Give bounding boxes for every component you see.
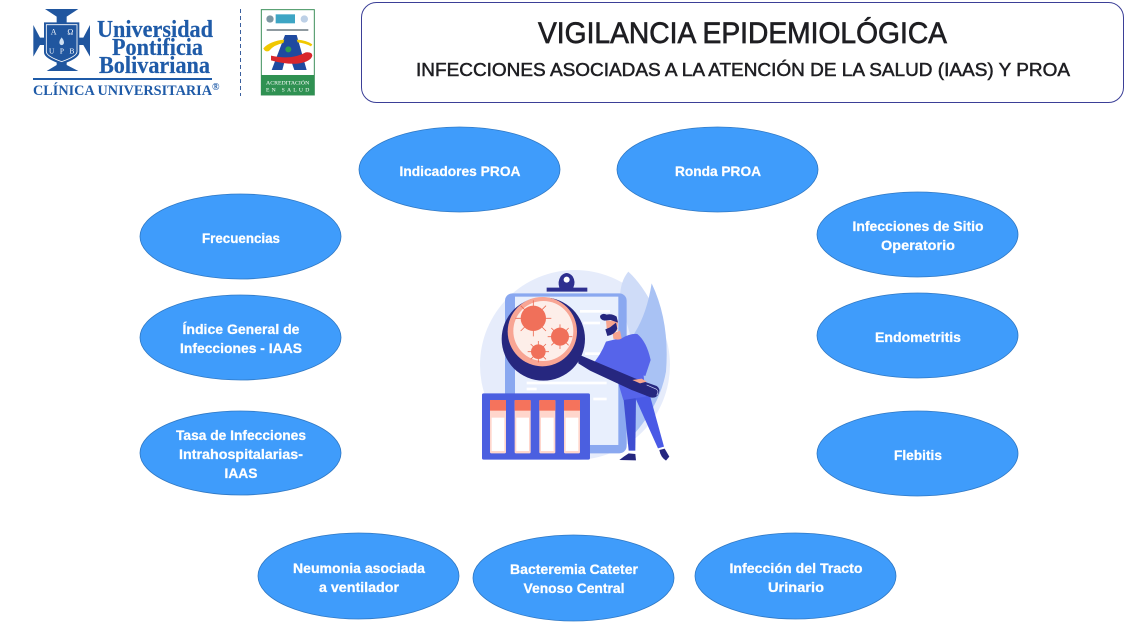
node: Índice General de Infecciones xyxy=(140,295,341,380)
node: Neumonia asociada a ventilador: Neumonia asociada xyxy=(293,560,425,576)
viruses xyxy=(515,300,572,362)
node: Flebitis xyxy=(817,411,1018,496)
logo: Universidad Pontificia Bolivariana xyxy=(33,9,220,99)
logo: Acreditación en Salud: ACREDITACIÓN xyxy=(266,78,309,86)
heading: title: VIGILANCIA EPIDEMIOLÓGICA xyxy=(538,17,947,50)
logo wordmark: Universidad xyxy=(97,17,214,43)
logo wordmark xyxy=(33,17,220,99)
node: Neumonia asociada a ventilador: a ventilador xyxy=(319,579,400,595)
node: Flebitis: Flebitis xyxy=(894,447,942,463)
panel: title box xyxy=(362,2,1124,102)
logo: Acreditación en Salud: EN SALUD xyxy=(266,88,309,94)
node: Tasa de Infecciones: Intrahospitalarias- xyxy=(179,446,303,462)
heading: subtitle: INFECCIONES ASOCIADAS A LA ATENCIÓN DE LA SALUD (IAAS) Y PROA xyxy=(416,59,1071,80)
illustration: doctor inspecting virus with magnifier xyxy=(480,270,670,461)
icon: university crest: UPB xyxy=(49,47,74,56)
node: Infección del Tracto Urinario: Urinario xyxy=(768,579,824,595)
node: Endometritis xyxy=(817,293,1018,378)
node: Frecuencias xyxy=(140,194,341,279)
icon: university crest xyxy=(33,9,90,71)
node: Infección del Tracto Urinario xyxy=(695,533,896,619)
clipboard xyxy=(505,273,627,453)
node: Indicadores PROA xyxy=(359,127,560,212)
logo: Acreditación en Salud xyxy=(261,10,314,95)
node: Ronda PROA xyxy=(617,127,818,212)
node: Índice General de Infecciones: Índice General de xyxy=(182,321,300,337)
node: Índice General de Infecciones: Infecciones - IAAS xyxy=(180,340,302,356)
logo wordmark: ® xyxy=(212,82,220,93)
magnifying glass xyxy=(502,297,585,381)
node: Ronda PROA: Ronda PROA xyxy=(675,163,761,179)
test tube rack xyxy=(482,393,590,460)
node: Tasa de Infecciones xyxy=(140,411,341,495)
node: Bacteremia Cateter Venoso Central: Venoso Central xyxy=(524,580,624,596)
node: Indicadores PROA: Indicadores PROA xyxy=(400,163,520,179)
node: Bacteremia Cateter Venoso Central: Bacteremia Cateter xyxy=(510,561,639,577)
node: Infecciones de Sitio Operatorio: Infecciones de Sitio xyxy=(852,218,984,234)
icon: university crest: A xyxy=(51,27,57,36)
node: Endometritis: Endometritis xyxy=(875,329,961,345)
node: Bacteremia Cateter Venoso Central xyxy=(473,535,674,621)
logo wordmark: Pontificia xyxy=(112,35,203,61)
node: Neumonia asociada a ventilador xyxy=(258,533,459,619)
node: Infecciones de Sitio Operatorio: Operatorio xyxy=(881,237,955,253)
logo wordmark: CLÍNICA UNIVERSITARIA xyxy=(33,82,213,99)
node: Tasa de Infecciones: IAAS xyxy=(224,465,258,481)
node: Tasa de Infecciones: Tasa de Infecciones xyxy=(176,427,306,443)
icon: university crest: Ω xyxy=(67,27,73,36)
man holding magnifier handle xyxy=(578,314,669,461)
logo wordmark: Bolivariana xyxy=(99,53,210,79)
node: Infección del Tracto Urinario: Infección del Tracto xyxy=(730,560,862,576)
node: Infecciones de Sitio Operatorio xyxy=(817,192,1018,277)
node: Frecuencias: Frecuencias xyxy=(202,230,280,246)
